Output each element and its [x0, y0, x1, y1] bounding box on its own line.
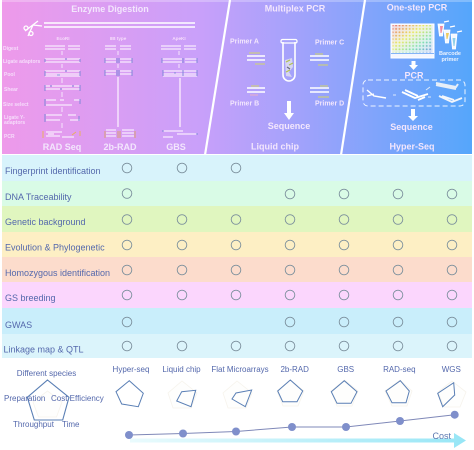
- method label: hyper-seq: Hyper-Seq: [389, 142, 435, 152]
- enzyme labels: [56, 36, 186, 41]
- step labels: Pool: [4, 72, 15, 78]
- primer labels: Primer A: [230, 38, 259, 46]
- primer labels: [230, 38, 344, 108]
- method label: liquid chip: Liquid chip: [251, 142, 299, 152]
- step labels: Ligate adaptors: [3, 59, 40, 65]
- panel: multiplex PCR: [230, 4, 344, 152]
- GBS workflow: [161, 46, 197, 137]
- method labels: RAD Seq: [43, 142, 81, 152]
- row: genetic background: Genetic background: [5, 217, 86, 227]
- genome lines: [44, 23, 195, 27]
- cost label: Cost: [432, 431, 452, 441]
- sequence label: Sequence: [390, 122, 433, 132]
- enzyme labels: EcoRI: [56, 36, 70, 41]
- step labels: PCR: [4, 134, 15, 140]
- radar: 2b-RAD: [277, 365, 309, 406]
- row: genetic background: [2, 206, 472, 232]
- enzyme labels: ApeKI: [172, 36, 186, 41]
- icon: 96-well plate: [391, 24, 434, 58]
- primer labels: Primer B: [230, 100, 259, 108]
- icon: barcode primer tubes: [438, 21, 462, 49]
- heading: multiplex PCR: Multiplex PCR: [265, 4, 326, 14]
- panel: enzyme digestion: [3, 4, 197, 152]
- row: fingerprint identification: [2, 155, 472, 181]
- header banner: [2, 0, 472, 155]
- row: GWAS: GWAS: [5, 320, 32, 330]
- heading: one-step PCR: One-step PCR: [387, 2, 448, 12]
- radar: WGS: [438, 365, 466, 407]
- cost arrow: [130, 433, 466, 448]
- radar: Flat Microarrays: [211, 365, 269, 408]
- row: homozygous identification: Homozygous identification: [5, 268, 110, 278]
- method labels: 2b-RAD: [104, 142, 137, 152]
- row: evolution and phylogenetic: Evolution & Phylogenetic: [5, 242, 105, 252]
- row: GS breeding: GS breeding: [5, 293, 56, 303]
- row: DNA traceability: [2, 181, 472, 206]
- radar legend: Cost Efficiency: [51, 394, 104, 403]
- step labels: Digest: [3, 46, 19, 52]
- radar legend: [4, 369, 104, 429]
- row: linkage map and QTL: [2, 334, 472, 358]
- row: homozygous identification: [2, 257, 472, 282]
- icon: test tube: [281, 40, 297, 81]
- enzyme labels: IIB type: [110, 36, 127, 41]
- row: evolution and phylogenetic: [2, 232, 472, 257]
- radar: Liquid chip: Liquid chip: [162, 365, 201, 374]
- step labels: [3, 46, 40, 140]
- arrow: plate to PCR: [409, 61, 418, 70]
- row: linkage map and QTL: Linkage map & QTL: [4, 344, 84, 354]
- step labels: Ligate Y-: [4, 115, 25, 121]
- radar legend: Throughput: [13, 420, 55, 429]
- RAD Seq workflow: [43, 46, 80, 138]
- step labels: Shear: [4, 87, 18, 93]
- barcode primer label: [439, 51, 461, 63]
- radar: WGS: WGS: [442, 365, 461, 374]
- PCR label: PCR: [404, 70, 424, 80]
- radar: Hyper-seq: [113, 365, 149, 407]
- panel: application matrix: [2, 155, 472, 358]
- step labels: adaptors: [4, 120, 25, 126]
- radar: GBS: [331, 365, 358, 406]
- radar legend: Time: [62, 420, 80, 429]
- primer labels: Primer C: [315, 40, 344, 46]
- sequence label: Sequence: [268, 121, 310, 131]
- barcode primer label: primer: [441, 57, 459, 63]
- radar: Flat Microarrays: Flat Microarrays: [211, 365, 269, 374]
- row: DNA traceability: DNA Traceability: [5, 192, 72, 202]
- dashed box with fragments: [363, 80, 465, 106]
- icon: scissors: [24, 21, 42, 36]
- primer labels: Primer D: [315, 100, 344, 108]
- 2b-RAD workflow: [105, 46, 135, 138]
- radar: RAD-seq: RAD-seq: [383, 365, 416, 374]
- barcode primer label: Barcode: [439, 51, 461, 57]
- radar: Hyper-seq: Hyper-seq: [113, 365, 149, 374]
- radar: Liquid chip: [162, 365, 201, 408]
- row: fingerprint identification: Fingerprint identification: [5, 166, 101, 176]
- arrow: to sequence: [284, 101, 294, 120]
- heading: enzyme digestion: Enzyme Digestion: [71, 4, 149, 14]
- row: GS breeding: [2, 282, 472, 308]
- step labels: Size select: [3, 102, 29, 108]
- method labels: GBS: [166, 142, 186, 152]
- radar: 2b-RAD: 2b-RAD: [280, 365, 309, 374]
- radar: GBS: GBS: [337, 365, 354, 374]
- cost line chart: [125, 411, 459, 439]
- radar: RAD-seq: [383, 365, 416, 406]
- row: GWAS: [2, 308, 472, 334]
- method labels: [43, 142, 186, 152]
- arrow: to sequence: [408, 109, 418, 121]
- radar legend: Different species: [17, 369, 76, 378]
- panel: one-step PCR: [363, 2, 465, 152]
- method radar comparison: [113, 365, 466, 408]
- primer bars: [247, 53, 329, 97]
- radar legend: Preparation: [4, 394, 45, 403]
